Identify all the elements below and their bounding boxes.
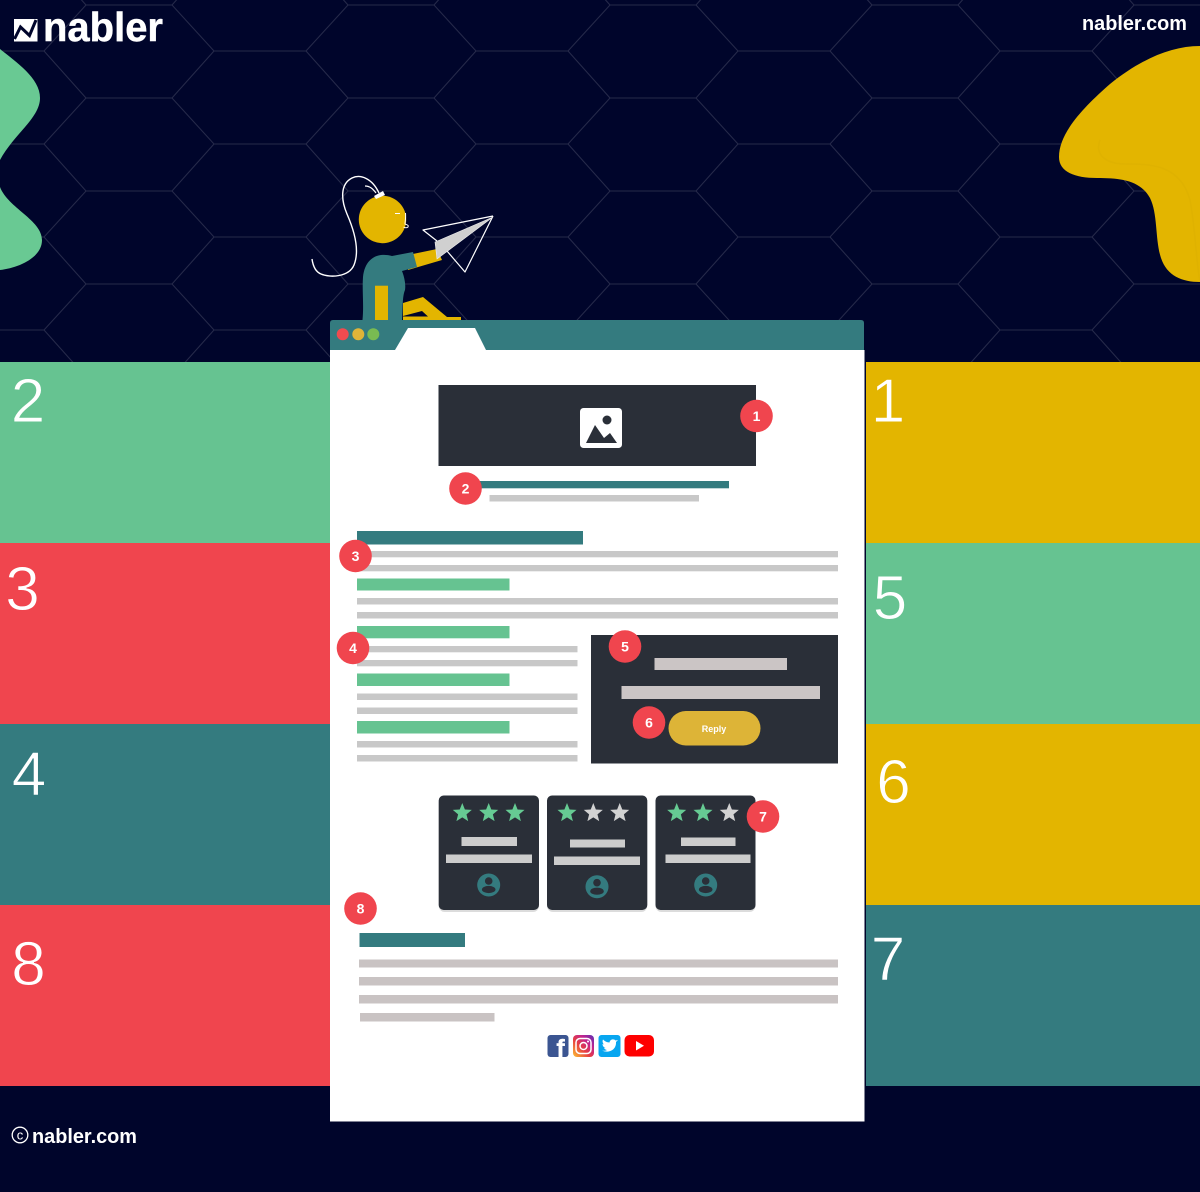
icon: image (580, 408, 622, 448)
logo wordmark: nabler (43, 4, 163, 50)
panel: browser window (330, 320, 864, 1122)
shape: yellow blob right (1059, 46, 1200, 282)
badge 3: 3 (352, 548, 360, 564)
illustration: figure with paper plane (312, 177, 493, 320)
band 4: 4 (12, 740, 46, 809)
badge 4: 4 (349, 640, 357, 656)
band 6 (866, 724, 1200, 905)
hero image block (438, 385, 756, 466)
band 5: 5 (873, 564, 907, 633)
band 1: 1 (871, 367, 905, 436)
badge 2: 2 (462, 480, 470, 496)
hair string (312, 177, 379, 276)
badges: numbered markers (337, 400, 779, 925)
sleeve and hand (408, 249, 442, 270)
head (359, 196, 406, 243)
band 4 (0, 724, 330, 905)
band 7 (866, 905, 1200, 1086)
text: copyright: nabler.com (32, 1126, 137, 1148)
badge 8 (344, 892, 377, 925)
badge 5: 5 (621, 638, 629, 654)
button: reply (668, 711, 760, 746)
panel: review cards (439, 796, 756, 912)
badge 1: 1 (753, 408, 761, 424)
card: review 1 (439, 796, 539, 912)
shape: green blob left (0, 49, 42, 270)
band 5 (866, 543, 1200, 724)
badge 7: 7 (759, 808, 767, 824)
band 2 (0, 362, 330, 543)
badge 8: 8 (357, 900, 365, 916)
badge 7 (747, 800, 779, 833)
paper plane (423, 216, 493, 272)
band 1 (866, 362, 1200, 543)
badge 4 (337, 632, 369, 664)
band 3: 3 (5, 555, 40, 624)
card: review 3 (656, 796, 756, 912)
icon: twitter (598, 1035, 620, 1057)
badge 1 (740, 400, 773, 432)
icon: youtube (624, 1035, 654, 1056)
band: left column (0, 362, 330, 1086)
window page (330, 350, 864, 1122)
window title bar (330, 320, 864, 350)
band 8 (0, 905, 330, 1086)
icon: logo mark (14, 19, 38, 42)
band 7: 7 (871, 925, 905, 994)
band 3 (0, 543, 330, 724)
badge 6 (633, 706, 665, 739)
section: body copy (357, 531, 838, 618)
legs (403, 297, 461, 320)
panel: reply call to action (591, 635, 838, 764)
icons: social media (548, 1035, 654, 1063)
section: sub-headed lists (357, 626, 578, 762)
button: reply: Reply (702, 724, 726, 734)
badge 5 (609, 630, 641, 663)
icon: facebook: f (556, 1035, 565, 1063)
torso (362, 252, 417, 320)
badge 3 (339, 540, 372, 572)
band 6: 6 (876, 748, 911, 817)
section: footer copy (359, 933, 838, 1022)
card: review 2 (547, 796, 647, 912)
headline bars (470, 481, 729, 502)
window tab (395, 328, 486, 350)
text: site url top right: nabler.com (1082, 13, 1187, 35)
text: copyright: c (17, 1128, 24, 1142)
icon: instagram (573, 1035, 594, 1057)
band 2: 2 (11, 367, 45, 436)
logo: nabler (14, 4, 163, 50)
band: right column (866, 362, 1200, 1086)
band 8: 8 (11, 930, 46, 999)
badge 2 (449, 472, 482, 505)
window buttons (337, 328, 379, 340)
stripe (375, 286, 388, 320)
badge 6: 6 (645, 714, 653, 730)
